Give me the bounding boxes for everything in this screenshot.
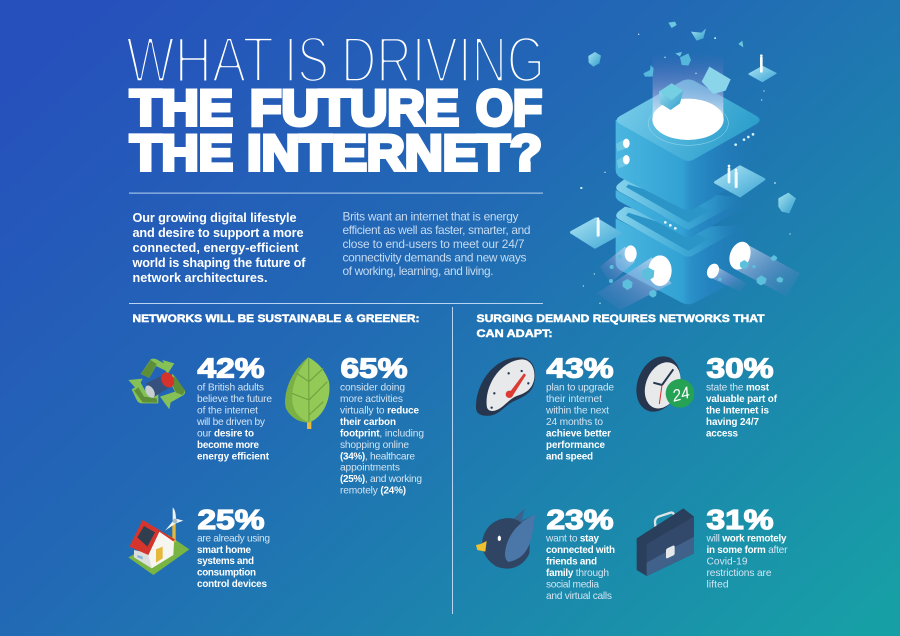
- intro: supporting text: of working, learning, and living.: [342, 264, 494, 278]
- icon: briefcase: [637, 508, 694, 576]
- stat: 31%: Covid-19: [706, 557, 748, 568]
- stat: 25%: are already using: [197, 533, 270, 544]
- stat: 43%: plan to upgrade: [546, 382, 614, 394]
- stat: 31%: restrictions are: [706, 568, 772, 579]
- status lights: [734, 133, 754, 146]
- title: FUTURE: [250, 80, 459, 136]
- stat: 43%: [545, 352, 614, 462]
- intro: bold statement: network architectures.: [132, 271, 268, 285]
- intro: bold statement: connected, energy-efficient: [132, 241, 299, 255]
- stat: 65%: more activities: [340, 394, 403, 405]
- stat: 23%: and virtual calls: [546, 591, 612, 602]
- stat: 42%: [196, 352, 272, 462]
- middle slab: [616, 179, 747, 237]
- stat: 31%: 31%: [706, 504, 774, 535]
- title: OF: [476, 80, 542, 136]
- stat: 42%: of British adults: [197, 382, 264, 394]
- icon: recycling arrows with battery: [128, 359, 185, 409]
- stat: 25%: 25%: [198, 504, 265, 535]
- stat: 65%: virtually to reduce: [340, 406, 420, 416]
- stat: 43%: achieve better: [546, 428, 611, 439]
- icon: leaf: [285, 357, 329, 429]
- stat: 43%: performance: [546, 440, 606, 451]
- stat: 23%: family through: [546, 568, 609, 579]
- stat: 23%: [545, 504, 615, 602]
- top block: [616, 79, 760, 210]
- stat: 65%: (34%), healthcare: [340, 451, 415, 462]
- title: THE: [130, 80, 233, 136]
- title: INTERNET?: [247, 125, 542, 181]
- stat: 43%: 43%: [546, 352, 614, 383]
- intro: bold statement: [132, 211, 306, 285]
- floating cubes: [588, 22, 796, 213]
- illustration: isometric data server tower: [571, 22, 800, 310]
- scattered particles: [580, 34, 791, 304]
- cylinders and hexagons at base: [597, 239, 800, 310]
- intro: supporting text: [342, 210, 530, 278]
- light beam above portal: [653, 53, 723, 119]
- heading: surging demand: [476, 313, 765, 340]
- stat: 65%: footprint, including: [340, 428, 424, 439]
- stat: 25%: smart home: [197, 545, 252, 556]
- stat: 23%: connected with: [546, 545, 615, 556]
- title: [126, 23, 545, 181]
- stat: 25%: consumption: [197, 568, 256, 578]
- stat: 23%: friends and: [546, 557, 597, 568]
- stat: 25%: control devices: [197, 579, 268, 590]
- stat: 42%: become more: [197, 440, 260, 451]
- stat: 25%: [197, 504, 270, 590]
- stat: 43%: and speed: [546, 451, 593, 462]
- icon: bird: [476, 508, 535, 569]
- heading: sustainable networks: NETWORKS WILL BE SUSTAINABLE & GREENER:: [132, 313, 420, 325]
- stat: 30%: [706, 352, 778, 439]
- stat: 23%: 23%: [546, 504, 614, 535]
- glowing portal: [652, 99, 724, 140]
- stat: 65%: appointments: [340, 463, 400, 474]
- stat: 30%: access: [706, 428, 738, 439]
- stat: 23%: social media: [546, 580, 599, 590]
- stat: 30%: 30%: [706, 352, 774, 383]
- stat: 30%: state the most: [706, 382, 770, 394]
- stat: 30%: valuable part of: [706, 394, 778, 405]
- stat: 23%: want to stay: [545, 534, 600, 545]
- stat: 30%: having 24/7: [706, 417, 760, 428]
- icon: speed gauge: [476, 357, 535, 416]
- title: DRIVING: [341, 23, 545, 96]
- icon: clock with 24 badge: [628, 350, 694, 418]
- intro: supporting text: Brits want an internet that is energy: [342, 210, 519, 224]
- stat: 65%: consider doing: [340, 382, 405, 394]
- stat: 42%: of the internet: [197, 406, 258, 416]
- stat: 42%: believe the future: [197, 394, 272, 405]
- title: WHAT: [126, 23, 274, 96]
- stat: 31%: will work remotely: [706, 534, 787, 545]
- heading: surging demand: SURGING DEMAND REQUIRES NETWORKS THAT: [476, 313, 765, 325]
- intro: bold statement: and desire to support a more: [132, 226, 304, 240]
- stat: 31%: [706, 504, 788, 590]
- intro: supporting text: close to end-users to meet our 24/7: [342, 237, 525, 251]
- stat: 43%: within the next: [545, 406, 609, 416]
- intro: bold statement: Our growing digital lifestyle: [132, 211, 296, 225]
- stat: 30%: the Internet is: [706, 406, 770, 416]
- stat: 42%: will be driven by: [196, 417, 266, 428]
- title: IS: [284, 23, 329, 96]
- floating platforms with people: [571, 54, 776, 247]
- intro: bold statement: world is shaping the future of: [132, 256, 306, 270]
- heading: surging demand: CAN ADAPT:: [476, 328, 552, 340]
- stat: 65%: (25%), and working: [340, 474, 422, 485]
- lower block: [616, 207, 760, 304]
- intro: supporting text: connectivity demands and new ways: [342, 250, 527, 264]
- icon: eco house with solar panels and wind turbine: [128, 507, 189, 575]
- stat: 43%: their internet: [546, 394, 602, 405]
- stat: 42%: energy efficient: [197, 451, 270, 462]
- intro: supporting text: efficient as well as faster, smarter, and: [342, 223, 530, 237]
- icon: clock with 24 badge: 24: [669, 383, 692, 406]
- stat: 42%: our desire to: [197, 428, 254, 439]
- stat: 25%: systems and: [197, 556, 254, 567]
- stat: 42%: 42%: [198, 352, 265, 383]
- stat: 31%: in some form after: [706, 545, 788, 556]
- stat: 43%: 24 months to: [546, 417, 603, 428]
- stat: 65%: their carbon: [340, 417, 396, 428]
- side ports on top block: [616, 139, 630, 169]
- stat: 31%: lifted: [706, 580, 729, 590]
- stat: 65%: 65%: [340, 352, 408, 383]
- stat: 65%: remotely (24%): [340, 486, 406, 496]
- stat: 65%: shopping online: [340, 440, 409, 451]
- title: THE: [130, 125, 233, 181]
- stat: 65%: [340, 352, 424, 496]
